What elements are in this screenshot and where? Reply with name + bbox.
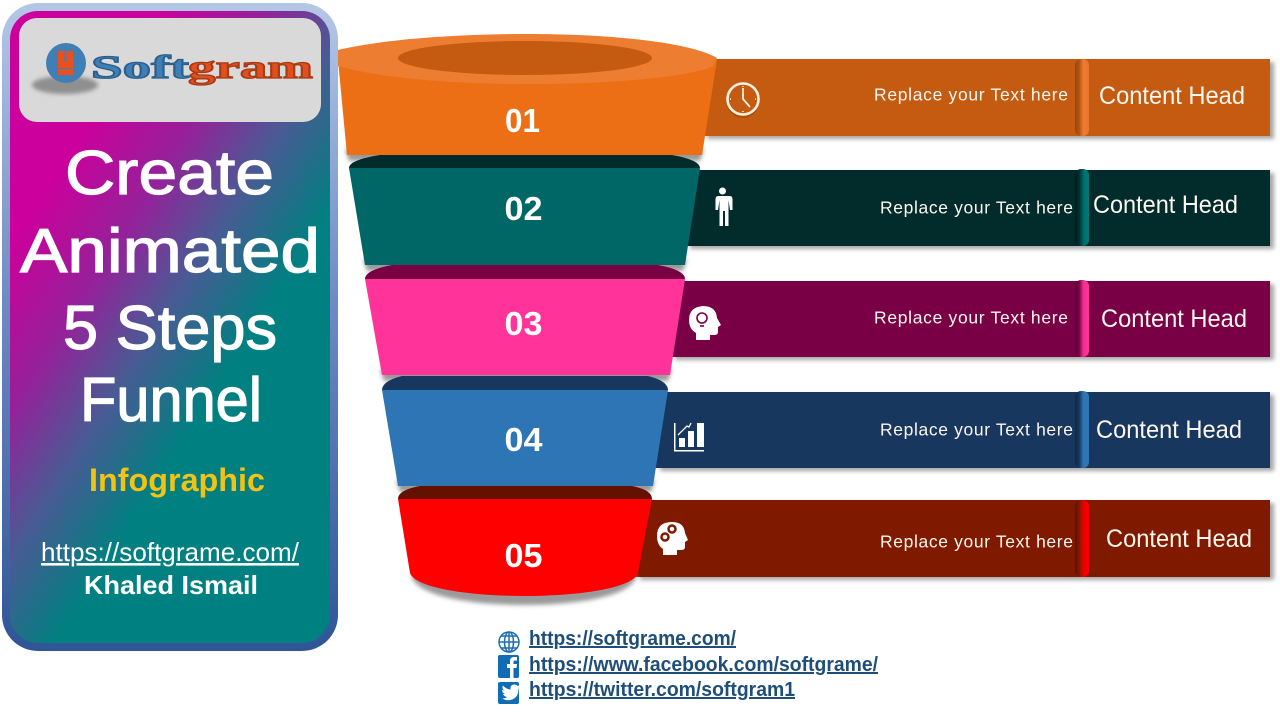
- title: 5 Steps: [63, 294, 277, 363]
- title: Funnel: [80, 366, 262, 435]
- funnel step 3: 03: [504, 305, 542, 342]
- logo shadow: [32, 76, 98, 94]
- bar 3 heading: Content Head: [1101, 305, 1247, 333]
- bar 2 heading: Content Head: [1093, 191, 1238, 219]
- separator 3: [1075, 280, 1089, 357]
- bar 1 heading: Content Head: [1099, 82, 1245, 110]
- funnel step 2: [345, 149, 704, 265]
- bar 5 heading: Content Head: [1106, 525, 1252, 553]
- funnel bottom shadow: [411, 575, 637, 605]
- separator 4: [1075, 391, 1089, 468]
- funnel step 5: [396, 480, 655, 596]
- bar 5: [635, 500, 1274, 580]
- funnel step 2: 02: [504, 190, 542, 227]
- title: [20, 139, 320, 435]
- subtitle: Infographic: [89, 462, 265, 498]
- bar 3 text: Replace your Text here: [874, 308, 1068, 328]
- funnel step 4: 04: [504, 421, 543, 458]
- funnel step 3: [363, 259, 687, 375]
- funnel step 1: 01: [505, 102, 540, 139]
- icon: clock: [727, 84, 759, 118]
- bar 4 text: Replace your Text here: [880, 420, 1073, 440]
- separator 5: [1075, 500, 1089, 577]
- icon: twitter: [498, 682, 520, 704]
- author: Khaled Ismail: [84, 570, 258, 600]
- bar 4: [655, 391, 1274, 471]
- bar 4 heading: Content Head: [1096, 416, 1242, 444]
- bar 3: [670, 280, 1274, 360]
- icon: globe: [499, 632, 519, 652]
- logo badge: [46, 43, 86, 83]
- icon: head with gears: [657, 522, 688, 555]
- panel: title sidebar: [2, 3, 338, 651]
- contact links: [498, 628, 878, 704]
- logo wordmark: [91, 50, 313, 86]
- icon: person: [716, 188, 732, 226]
- logo card: [19, 18, 321, 122]
- title: Create: [65, 139, 274, 208]
- icon: facebook: [498, 655, 519, 678]
- bar 5 text: Replace your Text here: [880, 532, 1073, 552]
- bar 2 text: Replace your Text here: [880, 198, 1073, 218]
- website url: https://softgrame.com/: [529, 628, 736, 650]
- logo wordmark: Soft: [91, 50, 189, 86]
- logo wordmark: gram: [188, 50, 313, 86]
- funnel step 5: 05: [504, 537, 542, 574]
- website link: https://softgrame.com/: [41, 537, 300, 567]
- funnel step 1: [338, 34, 717, 155]
- title: Animated: [20, 217, 320, 286]
- separator 1: [1075, 59, 1089, 136]
- facebook url: https://www.facebook.com/softgrame/: [529, 654, 878, 676]
- icon: head with lightbulb: [689, 306, 721, 340]
- separator 2: [1075, 169, 1089, 246]
- funnel: [338, 34, 717, 605]
- bar 1 text: Replace your Text here: [874, 84, 1068, 104]
- icon: bar chart: [674, 423, 704, 452]
- funnel step 4: [380, 369, 672, 486]
- bar 1: [700, 59, 1274, 139]
- bar 2: [685, 169, 1274, 249]
- twitter url: https://twitter.com/softgram1: [529, 679, 795, 701]
